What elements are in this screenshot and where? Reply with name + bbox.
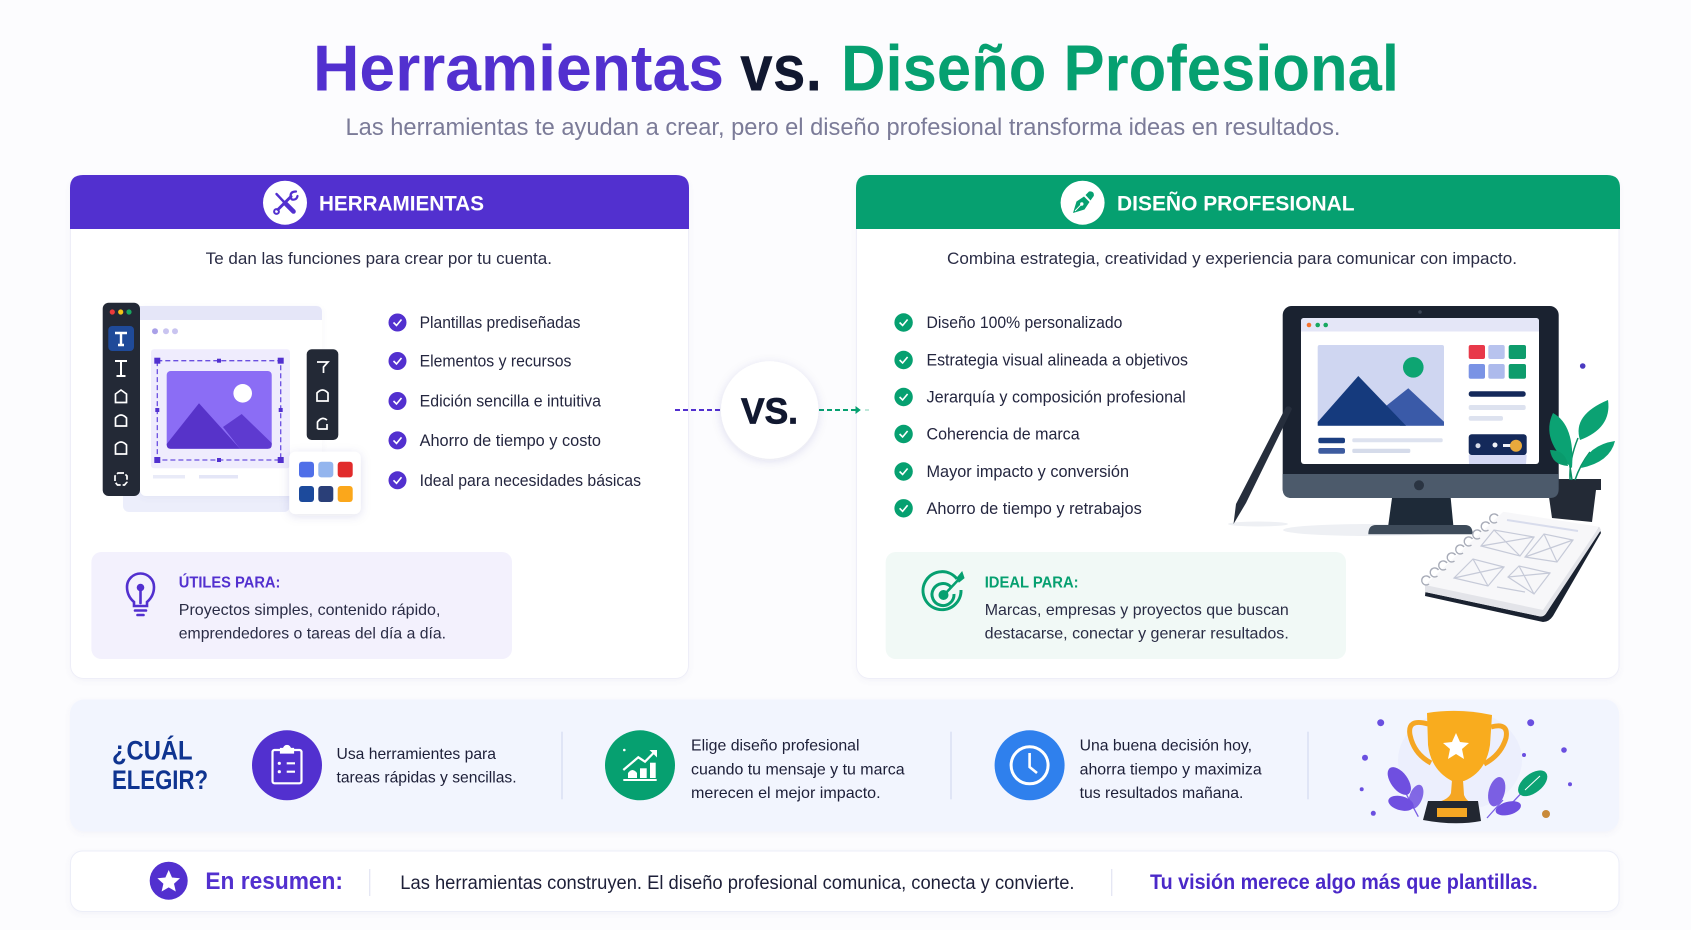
notebook: [1422, 512, 1601, 622]
screen: [1301, 318, 1539, 464]
item: personalizado: Diseño 100% personalizado: [926, 314, 1122, 332]
tip: diseno: [605, 730, 905, 802]
plant leaves: [1549, 400, 1615, 480]
panel header: [70, 175, 689, 229]
colour palette: [289, 452, 361, 514]
callout: utiles para: Proyectos simples, contenido rápido,: [179, 602, 440, 619]
item: plantillas: Plantillas prediseñadas: [420, 314, 580, 332]
title: [313, 32, 1399, 104]
item: estrategia: Estrategia visual alineada a objetivos: [926, 352, 1188, 370]
callout: ideal para: destacarse, conectar y generar resultados.: [985, 626, 1289, 643]
item: jerarquia: Jerarquía y composición profesional: [926, 388, 1186, 406]
pen: [1234, 406, 1292, 524]
panel: herramientas: [70, 175, 689, 678]
icon: pen nib: [1073, 191, 1094, 213]
callout: utiles para: [91, 552, 512, 659]
floating toolbar: [307, 349, 338, 440]
title: Diseño Profesional: [841, 32, 1399, 104]
tip: decision: [995, 730, 1262, 802]
item: ideal: Ideal para necesidades básicas: [420, 472, 641, 490]
item: coherencia: Coherencia de marca: [926, 426, 1080, 444]
heading: [112, 735, 208, 795]
item: elementos: Elementos y recursos: [420, 352, 571, 370]
tip: herramientas: Usa herramientes para: [336, 746, 496, 763]
callout: ideal para: [886, 552, 1346, 659]
subtitle: Las herramientas te ayudan a crear, pero el diseño profesional transforma ideas en resultados.: [346, 114, 1340, 141]
closing statement: Tu visión merece algo más que plantillas.: [1150, 871, 1538, 894]
panel: diseno profesional: [856, 175, 1620, 678]
plant pot: [1546, 479, 1601, 522]
icon: trophy: [1360, 710, 1572, 823]
item: ahorro: Ahorro de tiempo y costo: [420, 432, 601, 450]
panel intro text: Combina estrategia, creatividad y experiencia para comunicar con impacto.: [947, 249, 1517, 268]
tip: diseno: cuando tu mensaje y tu marca: [691, 761, 905, 778]
feature list: herramientas: [388, 314, 641, 490]
tip: decision: Una buena decisión hoy,: [1080, 738, 1252, 755]
tip: herramientas: tareas rápidas y sencillas.: [336, 770, 517, 787]
dashed line left: [675, 409, 721, 411]
icon: wrench and screwdriver: [274, 192, 298, 214]
item: impacto: Mayor impacto y conversión: [926, 463, 1129, 481]
illustration: desktop with plant and notebook: [1228, 306, 1615, 622]
illustration: editor window: [103, 303, 361, 514]
title: vs.: [740, 32, 822, 104]
panel header: DISEÑO PROFESIONAL: [1117, 192, 1355, 216]
callout: utiles para: emprendedores o tareas del día a día.: [179, 626, 446, 643]
sparkle: [1580, 363, 1585, 369]
tip: decision: tus resultados mañana.: [1080, 785, 1243, 802]
monitor: [1283, 306, 1559, 534]
vs badge: VS.: [741, 390, 798, 431]
summary text: Las herramientas construyen. El diseño profesional comunica, conecta y convierte.: [400, 873, 1074, 894]
icon: light bulb: [127, 574, 154, 615]
panel intro text: Te dan las funciones para crear por tu cuenta.: [206, 249, 552, 268]
panel: cual elegir: [70, 700, 1619, 832]
vs connector: [675, 361, 869, 459]
heading: ELEGIR?: [112, 765, 208, 795]
tip: herramientas: [252, 730, 517, 800]
callout: ideal para: IDEAL PARA:: [985, 574, 1079, 592]
label: En resumen:: [205, 868, 343, 895]
item: edicion: Edición sencilla e intuitiva: [420, 392, 602, 410]
vs badge: [721, 361, 818, 459]
panel header: HERRAMIENTAS: [319, 192, 484, 216]
left toolbar: [103, 303, 140, 496]
item: retrabajos: Ahorro de tiempo y retrabajos: [926, 500, 1142, 518]
tip: diseno: merecen el mejor impacto.: [691, 785, 881, 802]
panel header: [856, 175, 1620, 229]
tip: diseno: Elige diseño profesional: [691, 738, 860, 755]
callout: ideal para: Marcas, empresas y proyectos que buscan: [985, 602, 1289, 619]
title: Herramientas: [313, 32, 724, 104]
icon: target: [923, 572, 964, 610]
callout: utiles para: ÚTILES PARA:: [179, 574, 280, 592]
arrow right: [819, 407, 869, 413]
feature list: diseno: [894, 313, 1188, 518]
heading: ¿CUÁL: [112, 735, 193, 765]
summary bar: [70, 851, 1619, 912]
tip: decision: ahorra tiempo y maximiza: [1080, 761, 1262, 778]
icon: star badge: [150, 862, 188, 900]
